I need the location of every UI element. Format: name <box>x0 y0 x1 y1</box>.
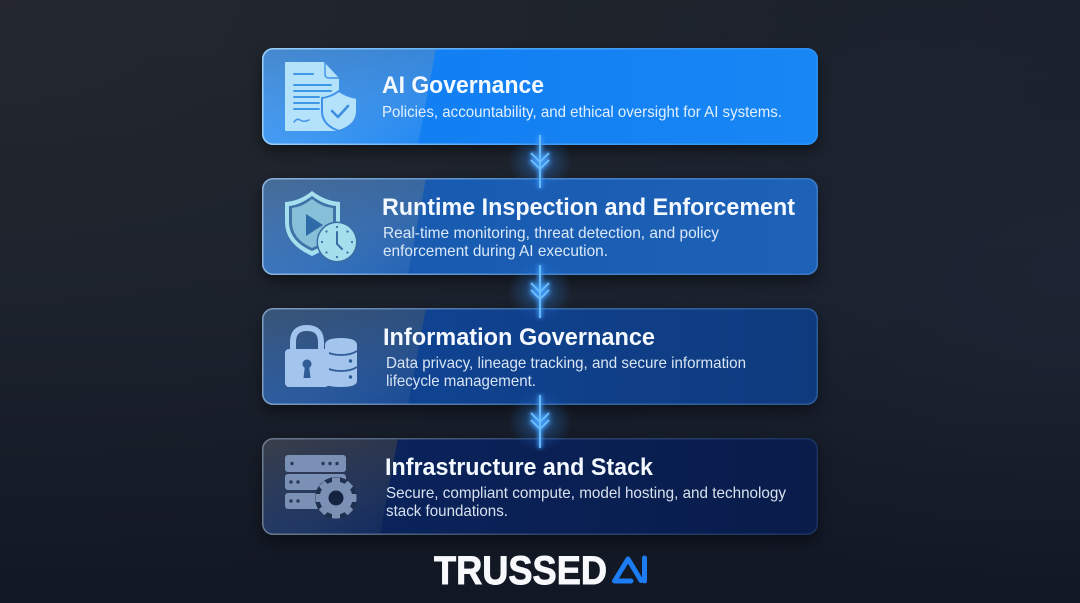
arrow: Runtime to Information <box>508 261 572 321</box>
icon: padlock with database <box>285 328 357 387</box>
arrow: AI Governance to Runtime <box>508 131 572 191</box>
heading: Information Governance: Information Governance <box>383 324 655 351</box>
text: Runtime description line 2: enforcement during AI execution. <box>383 243 608 260</box>
icon: shield with play button and clock <box>285 191 358 262</box>
heading: Runtime Inspection and Enforcement: Runtime Inspection and Enforcement <box>382 194 795 221</box>
text: Information description: Data privacy, lineage tracking, and secure information <box>386 355 746 372</box>
heading: Infrastructure and Stack: Infrastructure and Stack <box>385 454 654 481</box>
icon: server stack with gear <box>285 455 357 519</box>
arrow: Information to Infrastructure <box>508 391 572 451</box>
panel: Runtime Inspection and Enforcement <box>262 178 818 275</box>
panel: AI Governance <box>262 48 818 145</box>
text: Infrastructure description line 2: stack foundations. <box>386 503 508 520</box>
text: Infrastructure description: Secure, compliant compute, model hosting, and technology <box>386 485 786 502</box>
heading: AI Governance: AI Governance <box>382 72 544 99</box>
icon: document with shield <box>285 62 357 131</box>
text: Information description line 2: lifecycle management. <box>386 373 536 390</box>
text: Runtime description: Real-time monitoring, threat detection, and policy <box>383 225 719 242</box>
panel: Infrastructure and Stack <box>262 438 818 535</box>
logo: Trussed AI: TRUSSED <box>434 549 607 593</box>
text: AI Governance description: Policies, accountability, and ethical oversight for AI systems. <box>382 104 782 121</box>
icon: logo triangle mark <box>614 558 644 581</box>
panel: Information Governance <box>262 308 818 405</box>
